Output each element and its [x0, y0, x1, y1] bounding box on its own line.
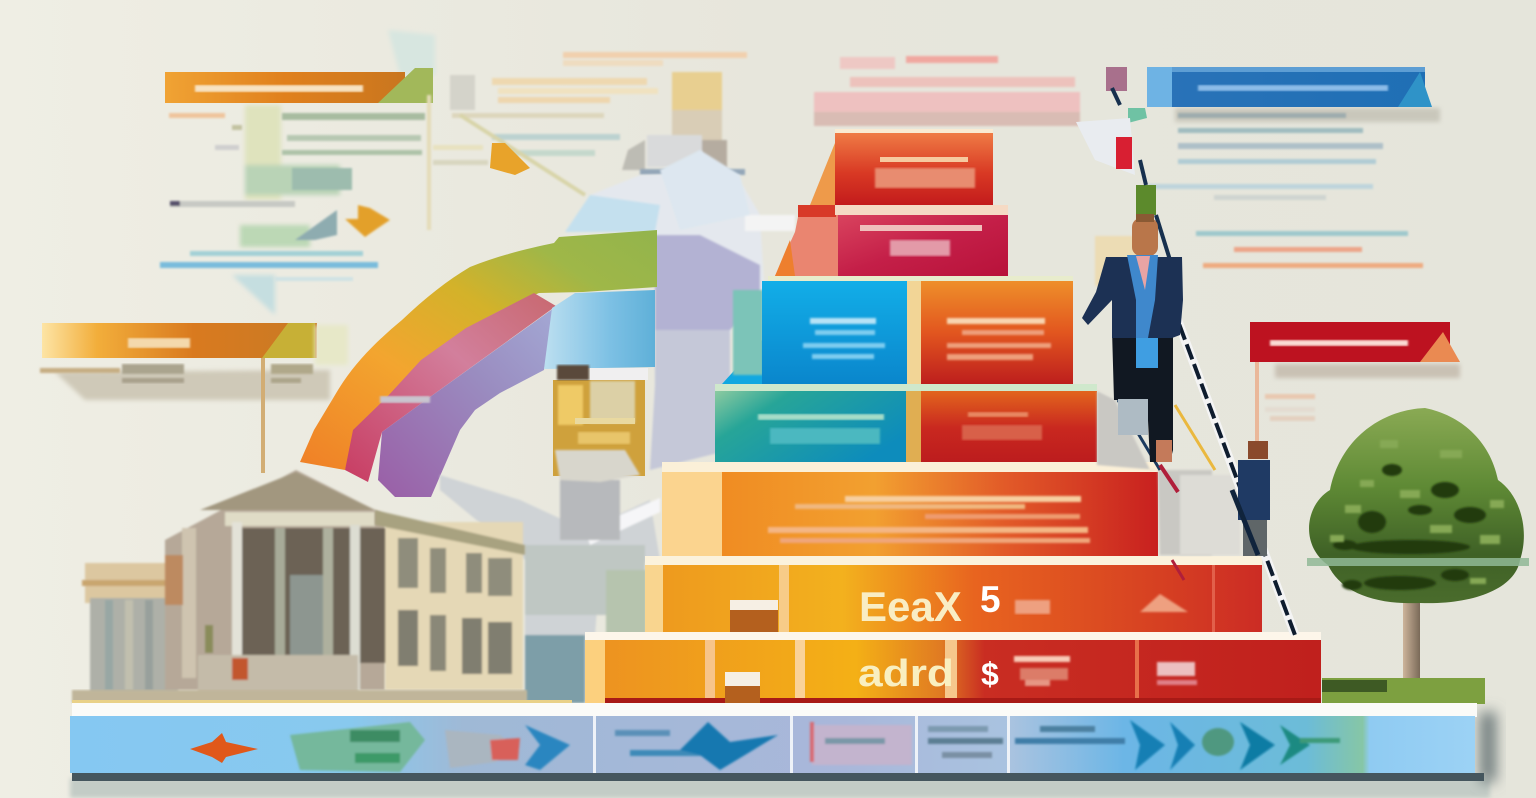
shadow: [1175, 108, 1440, 122]
mid-left orange banner with shadow: [40, 323, 348, 473]
grass: [1322, 678, 1485, 704]
step 3: wide orange block: [662, 462, 1159, 558]
person: businessman: [1082, 214, 1183, 462]
arc: rainbow band: [300, 230, 657, 497]
note panel: [928, 726, 1003, 758]
grey side building: [440, 450, 660, 703]
dividers: [593, 716, 1010, 773]
flag notes: [1265, 394, 1315, 421]
classical building: [72, 470, 572, 706]
jacket: [1082, 257, 1183, 338]
trunk: [1403, 595, 1420, 685]
icon: orange arrow: [345, 205, 390, 237]
head: [1132, 218, 1158, 256]
icon: small white box: [622, 135, 745, 175]
centre backdrop polygons: [565, 150, 795, 470]
pyramid: [585, 129, 1321, 703]
top-left orange banner with notes: [160, 30, 435, 315]
glass ring: [1307, 558, 1529, 566]
step 2: orange-red block: 5: [980, 579, 1001, 620]
banner: [1147, 67, 1432, 107]
note panel: [810, 722, 912, 765]
step 2: orange-red block: [645, 556, 1262, 632]
tree: [1307, 408, 1529, 704]
icon: orange marker: [490, 143, 530, 175]
crown: [1309, 408, 1524, 603]
top-centre notes with orange marker: [433, 52, 747, 195]
ladder rails: [1112, 88, 1170, 260]
tabs: [1076, 67, 1156, 215]
step 1: bottom block: $: [981, 656, 999, 692]
icon: blue arrows: [615, 722, 778, 770]
icon: orange fish: [190, 733, 258, 763]
step label: EeaX: [859, 583, 962, 630]
step 6: crimson block: [775, 205, 1008, 276]
note lines: [1148, 113, 1423, 268]
orange block text: [947, 318, 1051, 360]
shadow: [55, 370, 330, 400]
portico: [165, 470, 388, 695]
grey stair behind the figures: [1097, 391, 1212, 555]
icon: cup box: [730, 600, 778, 632]
note backing: [232, 30, 435, 315]
banner: [165, 68, 433, 103]
ladder with coloured tabs: [1076, 67, 1295, 635]
blue block text: [803, 318, 885, 359]
shadow: [1275, 364, 1460, 378]
note lines: [40, 364, 313, 383]
icon: cup box: [725, 672, 760, 703]
left wing: [82, 563, 178, 693]
sky panel inside the arc: [544, 290, 655, 369]
step 1: bottom block: [585, 632, 1321, 703]
step 7: top block: [810, 129, 993, 205]
banner: [42, 323, 317, 358]
gold box: [553, 365, 648, 476]
red flag banner: [1250, 322, 1460, 457]
base band: [70, 703, 1484, 781]
step label: adrd: [858, 653, 954, 695]
step 4: teal and red blocks: [715, 391, 1097, 465]
icon: red and blue marker: [445, 725, 570, 770]
note lines: [160, 95, 431, 281]
arc label: [380, 396, 430, 403]
trousers: [1112, 330, 1173, 462]
pink heading notes: [814, 56, 1080, 126]
step 5: blue and orange blocks: [722, 281, 1073, 384]
blue top-right banner with notes: [1147, 67, 1440, 268]
right wing: [375, 510, 525, 690]
icon: chevron chain: [1015, 720, 1340, 770]
icon: green arrows: [290, 722, 425, 772]
flag pole: [1255, 362, 1259, 457]
person: climbing figure: [1232, 441, 1270, 556]
